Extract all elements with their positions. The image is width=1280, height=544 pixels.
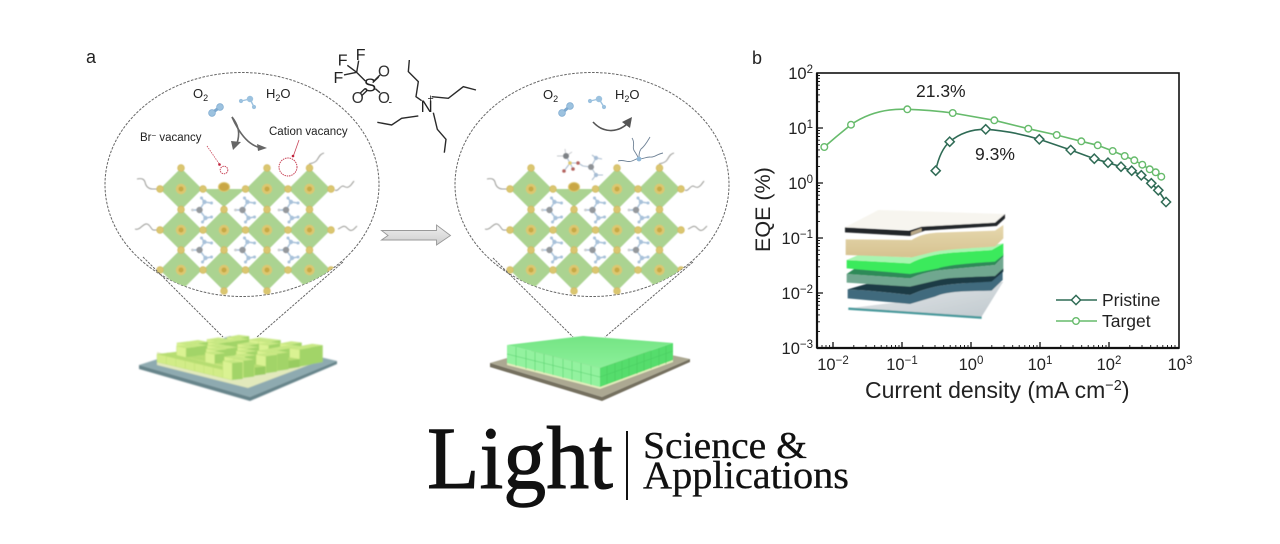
substrate	[139, 336, 337, 397]
plot frame and ticks	[817, 73, 1179, 348]
film: rough perovskite on substrate	[139, 334, 337, 401]
panel label a: a	[86, 47, 97, 67]
triflate atoms: O	[378, 64, 390, 81]
x tick labels: 10	[1097, 356, 1115, 374]
x tick labels: 10	[959, 356, 977, 374]
series: pristine	[931, 125, 1171, 207]
oxygen label: O	[193, 86, 203, 101]
y tick labels: 10	[788, 175, 807, 193]
x tick labels: 0	[977, 355, 983, 367]
cube grid	[507, 346, 673, 385]
arrow: blocked degradation	[593, 117, 632, 131]
y tick labels: 10	[788, 65, 807, 83]
arrow: degradation paths	[231, 117, 267, 151]
y axis title: EQE (%)	[751, 167, 775, 252]
logo line Applications: Applications	[643, 454, 849, 497]
x tick labels: 2	[1115, 355, 1121, 367]
panel a: before treatment magnified view	[105, 72, 379, 337]
contact reflection	[911, 228, 922, 235]
chart: EQE versus current density	[751, 64, 1192, 403]
icon: oxygen molecule	[559, 103, 573, 116]
chemical structure: triflate anion and tetrabutylammonium cation	[333, 47, 476, 153]
triflate atoms: S	[364, 75, 376, 96]
logo line Science &: Science &	[643, 425, 807, 467]
y tick labels: 1	[807, 119, 813, 131]
y tick labels: −2	[800, 284, 813, 296]
glass substrate	[848, 282, 1003, 317]
oxygen label: 2	[553, 94, 558, 104]
top face	[507, 336, 673, 368]
x tick labels: 10	[817, 356, 836, 374]
journal logo	[427, 410, 849, 508]
water label: 2	[624, 94, 629, 104]
icon: oxygen molecule	[209, 104, 223, 116]
logo divider	[626, 431, 628, 500]
x axis title: −2	[1105, 378, 1122, 394]
teal layer	[847, 257, 1003, 287]
arrow: treatment direction	[382, 225, 450, 245]
triflate atoms: O	[378, 90, 390, 107]
annotation: target peak: 21.3%	[916, 81, 966, 101]
panel label b: b	[752, 48, 762, 68]
ammonium atoms: N	[421, 97, 433, 116]
Br vacancy label: Br	[140, 132, 152, 144]
cation vacancy marker	[279, 140, 299, 176]
y tick labels: 10	[782, 340, 800, 358]
x tick labels: 10	[886, 356, 905, 374]
triflate atoms: O	[352, 90, 364, 107]
x axis title: )	[1122, 377, 1130, 403]
x tick labels: −2	[836, 355, 849, 367]
x tick labels: −1	[905, 355, 918, 367]
ammonium atoms: +	[428, 93, 434, 105]
triflate atoms: F	[333, 70, 343, 87]
water label: H	[266, 86, 275, 101]
inset: device layer stack	[845, 210, 1005, 318]
y tick labels: 10	[782, 230, 800, 248]
cube rows	[157, 334, 323, 383]
water label: H	[615, 87, 624, 102]
legend: Target	[1102, 311, 1151, 331]
y tick labels: 2	[807, 64, 813, 76]
Br vacancy marker	[207, 146, 228, 174]
y tick labels: 10	[788, 120, 807, 138]
y tick labels	[782, 64, 813, 358]
projection lines: after	[493, 258, 693, 337]
zoom circle: before	[105, 72, 379, 296]
x tick labels	[817, 355, 1192, 374]
water label: 2	[275, 93, 280, 103]
perovskite lattice: after	[485, 153, 707, 294]
legend: Pristine	[1102, 290, 1160, 310]
right face	[600, 343, 673, 387]
x tick labels: 1	[1046, 355, 1052, 367]
x tick labels: 3	[1186, 355, 1192, 367]
y tick labels: 10	[782, 285, 800, 303]
dark blue layer	[848, 269, 1003, 304]
triflate atoms	[333, 47, 393, 108]
water label: O	[629, 87, 640, 102]
tan layer	[846, 225, 1003, 257]
triflate atoms: F	[356, 47, 366, 64]
oxygen label: O	[543, 87, 553, 102]
film: smooth perovskite on substrate	[490, 336, 690, 401]
panel a: after treatment magnified view	[455, 72, 729, 337]
underlayer	[507, 358, 673, 389]
triflate atoms: -	[389, 96, 393, 108]
adsorbed triflate and cation molecules	[557, 149, 603, 180]
projection lines: before	[143, 257, 343, 337]
Br vacancy label: vacancy	[156, 132, 202, 144]
underlayer	[157, 350, 322, 388]
series: target	[821, 106, 1165, 180]
substrate	[490, 336, 690, 397]
ammonium chains	[377, 60, 476, 153]
top electrode	[845, 210, 1005, 230]
triflate atoms: F	[338, 53, 348, 70]
icon: water molecule	[588, 96, 606, 109]
x tick labels: 10	[1168, 356, 1186, 374]
zoom circle: after	[455, 72, 729, 296]
oxygen label: 2	[203, 93, 208, 103]
x axis title: Current density (mA cm	[865, 377, 1105, 403]
cation vacancy label: Cation vacancy	[269, 126, 348, 138]
logo word Light: Light	[427, 410, 613, 508]
y tick labels: 0	[807, 174, 813, 186]
triflate bonds	[344, 61, 380, 95]
water label: O	[280, 86, 291, 101]
annotation: pristine peak: 9.3%	[975, 144, 1015, 164]
y tick labels: −3	[800, 339, 813, 351]
icon: water molecule	[239, 96, 256, 109]
left face	[507, 345, 600, 387]
bright green emissive layer	[847, 243, 1003, 274]
Br vacancy label: −	[152, 131, 156, 140]
y tick labels: −1	[800, 229, 813, 241]
adsorbed tetrabutylammonium	[618, 137, 663, 162]
legend	[1056, 290, 1160, 331]
perovskite lattice: before	[135, 153, 357, 294]
x tick labels: 10	[1028, 356, 1046, 374]
